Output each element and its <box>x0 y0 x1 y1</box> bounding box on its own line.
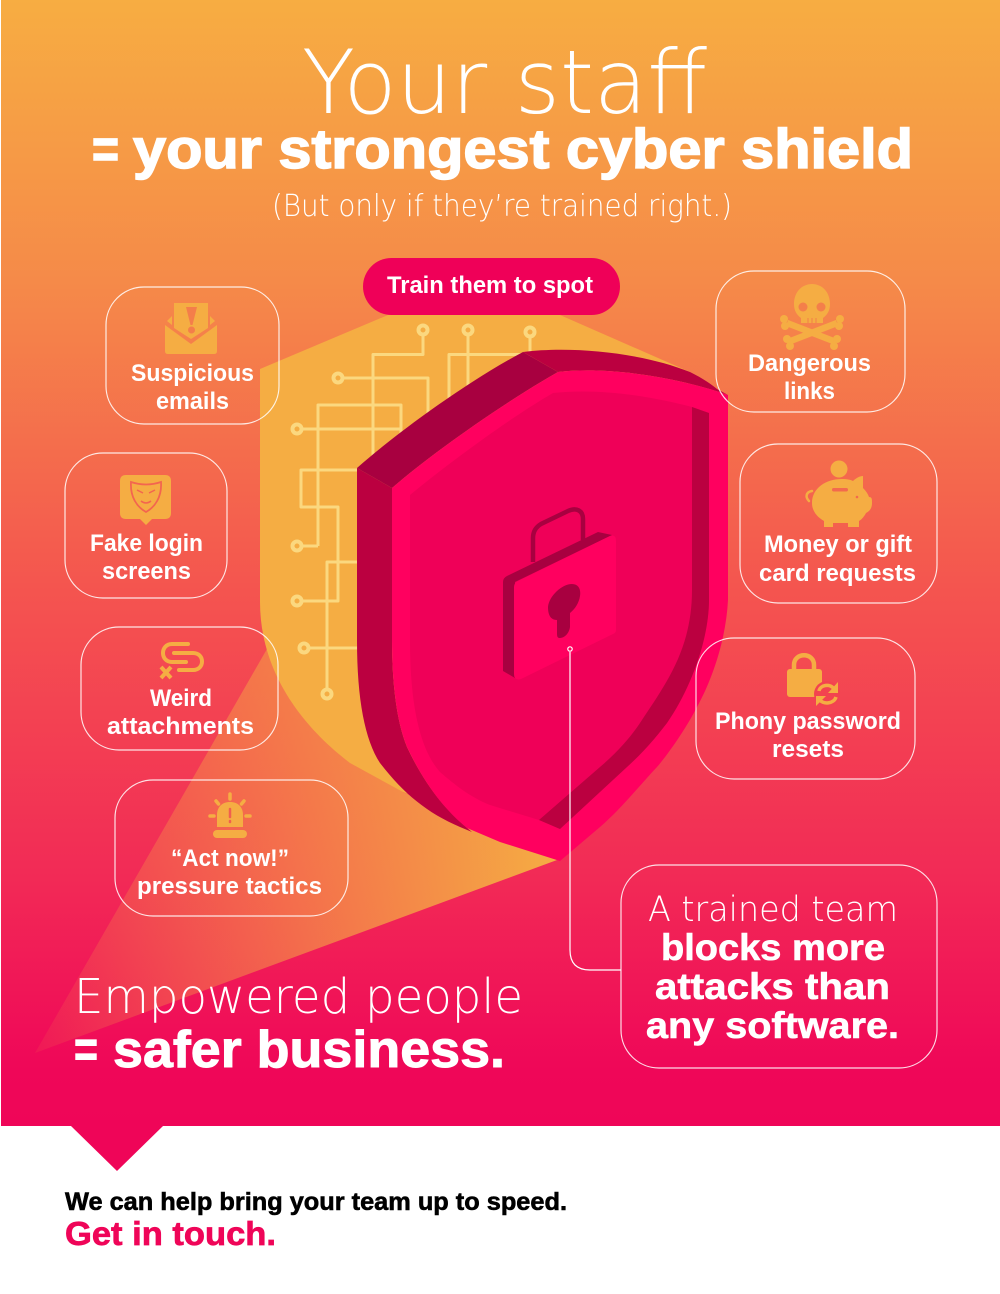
card: money or gift card requests <box>740 444 937 603</box>
lock <box>503 509 616 679</box>
icon: paperclip <box>161 644 202 678</box>
card: money or gift card requests: Money or gift <box>764 531 912 558</box>
callout: trained team: attacks than <box>655 966 890 1007</box>
icon: alarm <box>210 794 250 838</box>
pill: train them to spot <box>363 258 620 315</box>
card: fake login screens <box>65 453 227 598</box>
title: Your staff <box>302 31 707 134</box>
icon: envelope <box>165 303 217 354</box>
card: fake login screens: Fake login <box>90 530 203 557</box>
title <box>92 31 913 224</box>
footer call to action: We can help bring your team up to speed. <box>65 1188 567 1216</box>
card: phony password resets <box>696 638 915 779</box>
closing statement: Empowered people <box>74 969 523 1025</box>
closing statement: = <box>74 1021 98 1079</box>
icon: skull and crossbones <box>780 284 844 350</box>
callout: trained team: A trained team <box>648 890 898 930</box>
callout: trained team: any software. <box>646 1005 899 1046</box>
icon: padlock with refresh <box>787 655 840 707</box>
speech pointer <box>71 1126 163 1171</box>
icon: piggy bank <box>807 460 872 527</box>
card: act now pressure tactics <box>115 780 348 916</box>
card: weird attachments <box>81 627 278 750</box>
card: dangerous links: links <box>784 378 835 405</box>
light beam <box>35 635 557 1053</box>
card: suspicious emails <box>106 287 279 424</box>
title: = <box>92 117 119 180</box>
callout: trained team <box>621 865 937 1068</box>
shield <box>357 350 728 861</box>
card: fake login screens: screens <box>102 558 191 585</box>
card: weird attachments: Weird <box>150 685 212 712</box>
connector line from lock to callout <box>568 647 621 970</box>
card: suspicious emails: Suspicious <box>131 360 254 387</box>
circuit lines <box>292 326 534 698</box>
card: act now pressure tactics: pressure tactics <box>137 873 322 900</box>
card: weird attachments: attachments <box>107 713 254 740</box>
card: phony password resets: Phony password <box>715 708 901 735</box>
title: (But only if they’re trained right.) <box>272 189 732 224</box>
card: money or gift card requests: card requests <box>759 560 916 587</box>
card: phony password resets: resets <box>772 736 844 763</box>
footer call to action <box>65 1188 567 1252</box>
callout: trained team: blocks more <box>661 927 885 968</box>
title: your strongest cyber shield <box>133 117 913 180</box>
card: suspicious emails: emails <box>156 388 229 415</box>
card: act now pressure tactics: “Act now!” <box>171 845 289 872</box>
footer call to action: Get in touch. <box>65 1215 276 1252</box>
closing statement: safer business. <box>113 1021 505 1079</box>
shield back glow <box>260 315 690 830</box>
closing statement <box>74 969 523 1079</box>
pill: train them to spot: Train them to spot <box>387 272 593 299</box>
card: dangerous links: Dangerous <box>748 350 871 377</box>
icon: mask <box>120 475 171 525</box>
card: dangerous links <box>716 271 905 412</box>
